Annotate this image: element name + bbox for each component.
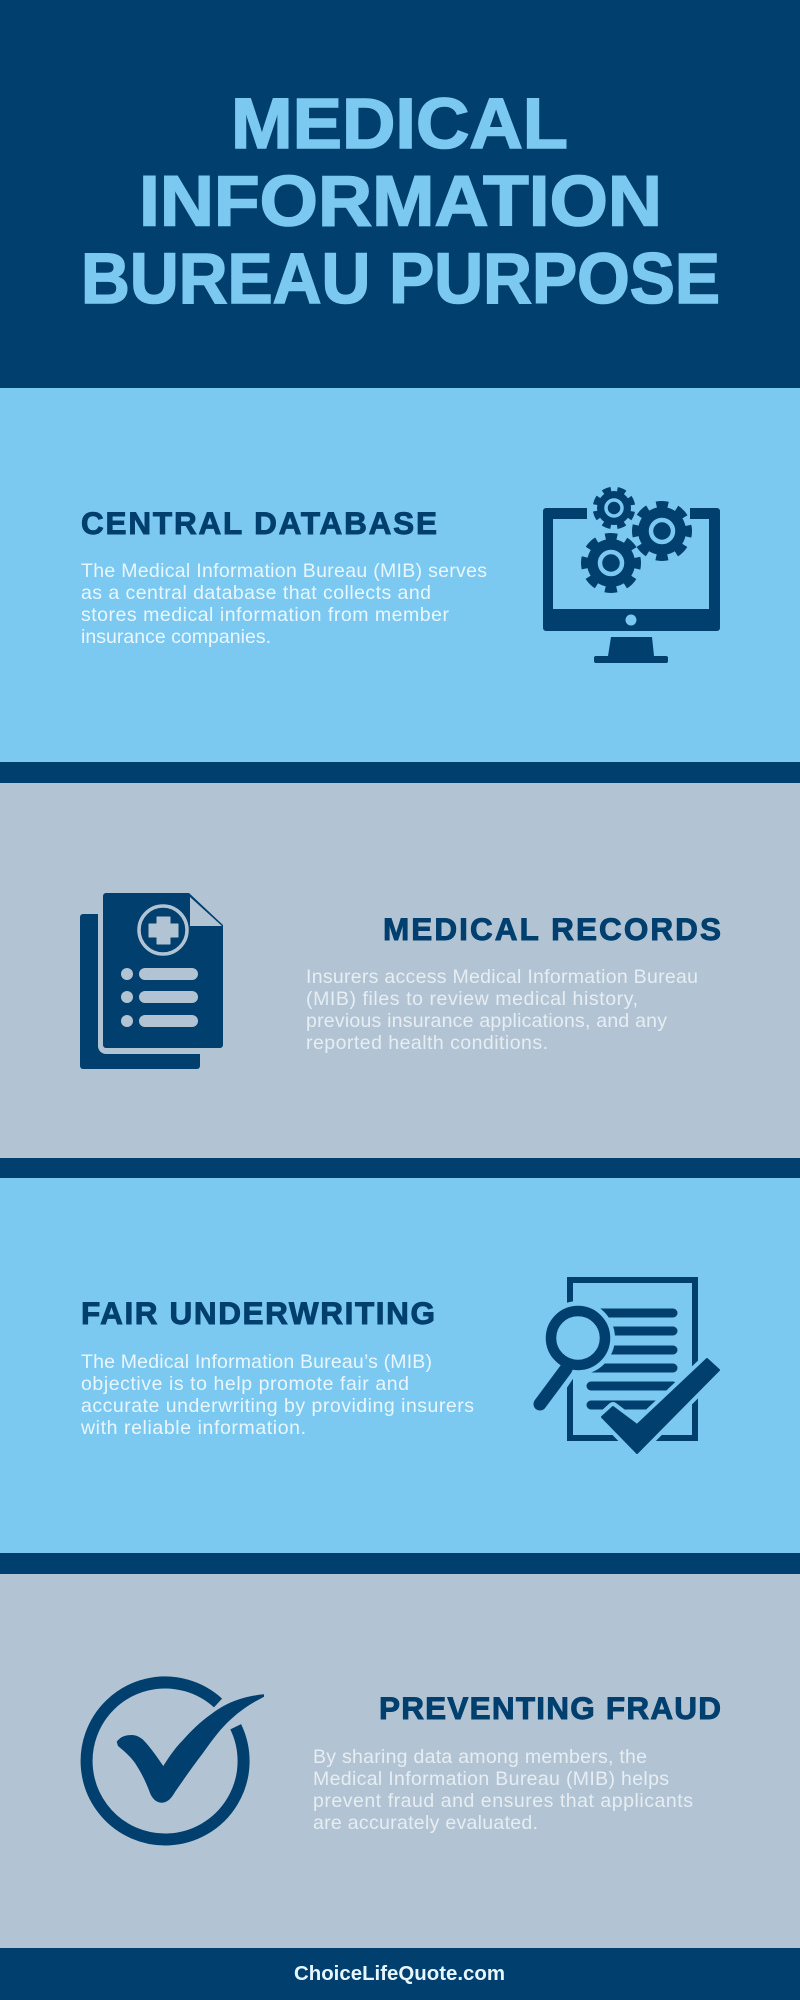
icon: monitor with gears xyxy=(543,484,720,663)
text block: fair underwriting: The Medical Information Bureau’s (MIB) xyxy=(81,1351,432,1373)
panel: central database xyxy=(0,388,800,762)
heading: medical records: MEDICAL RECORDS xyxy=(383,911,721,947)
text block: medical records: previous insurance applications, and any xyxy=(306,1010,667,1032)
text block: central database: stores medical information from member xyxy=(81,604,450,626)
text block: medical records: Insurers access Medical Information Bureau xyxy=(306,966,698,988)
text block: central database xyxy=(81,560,487,648)
text block: fair underwriting xyxy=(80,1351,474,1439)
heading: central database: CENTRAL DATABASE xyxy=(81,505,437,541)
panel: medical records xyxy=(0,783,800,1158)
icon: circled check mark xyxy=(87,1682,264,1839)
panel: fair underwriting xyxy=(0,1178,800,1553)
icon: medical documents xyxy=(80,893,223,1069)
title: MEDICAL xyxy=(231,85,568,164)
text block: preventing fraud: Medical Information Bureau (MIB) helps xyxy=(313,1768,669,1790)
text block: medical records xyxy=(306,966,698,1054)
footer website text: ChoiceLifeQuote.com xyxy=(294,1962,505,1985)
heading: preventing fraud: PREVENTING FRAUD xyxy=(379,1690,721,1726)
text block: central database: insurance companies. xyxy=(81,626,271,648)
text block: central database: as a central database that collects and xyxy=(81,582,431,604)
text block: preventing fraud: are accurately evaluated. xyxy=(313,1812,538,1834)
text block: medical records: reported health conditions. xyxy=(306,1032,548,1054)
title: BUREAU PURPOSE xyxy=(81,240,720,319)
text block: fair underwriting: with reliable information. xyxy=(80,1417,306,1439)
text block: preventing fraud: By sharing data among members, the xyxy=(313,1746,647,1768)
text block: fair underwriting: objective is to help promote fair and xyxy=(81,1373,409,1395)
footer xyxy=(0,1948,800,2000)
text block: preventing fraud xyxy=(313,1746,693,1834)
header panel xyxy=(0,0,800,388)
text block: fair underwriting: accurate underwriting by providing insurers xyxy=(81,1395,474,1417)
panel: preventing fraud xyxy=(0,1574,800,1948)
text block: medical records: (MIB) files to review medical history, xyxy=(306,988,638,1010)
title xyxy=(81,85,720,319)
title: INFORMATION xyxy=(139,162,662,242)
text block: central database: The Medical Information Bureau (MIB) serves xyxy=(81,560,487,582)
heading: fair underwriting: FAIR UNDERWRITING xyxy=(81,1295,435,1331)
icon: document with magnifier and check xyxy=(540,1280,719,1453)
text block: preventing fraud: prevent fraud and ensures that applicants xyxy=(313,1790,693,1812)
